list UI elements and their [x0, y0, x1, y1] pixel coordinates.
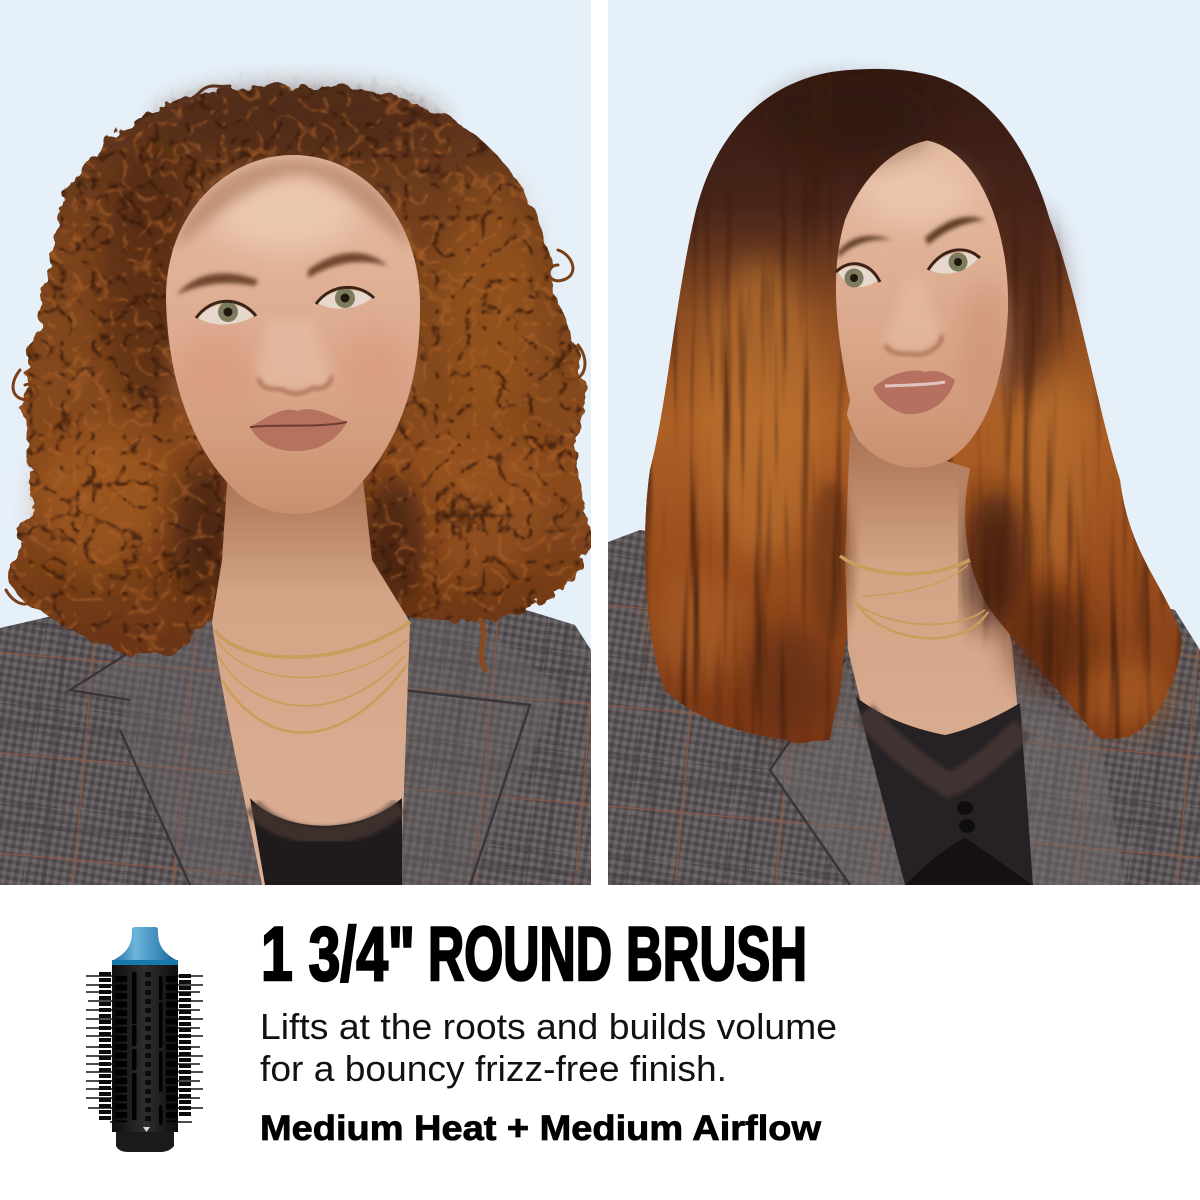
face	[166, 155, 420, 514]
brush blue cap	[112, 927, 178, 965]
brush centre pins	[145, 972, 151, 1124]
brush inner tufts	[121, 976, 172, 1122]
eyes	[196, 287, 374, 325]
eyebrows	[177, 253, 388, 295]
heading	[261, 912, 807, 997]
description text: Lifts at the roots and builds volume	[260, 1006, 837, 1047]
lip gap	[885, 382, 945, 386]
backdrop	[608, 0, 1200, 650]
brush bristle tips	[86, 976, 203, 1122]
brush base	[116, 1132, 174, 1152]
hair side, right lock	[965, 140, 1182, 739]
blazer	[0, 610, 591, 885]
hair front, left curtain	[643, 64, 938, 748]
blazer	[608, 530, 1200, 885]
backdrop	[0, 0, 591, 650]
brush barrel	[112, 962, 178, 1132]
necklaces	[215, 622, 410, 733]
eyebrows	[838, 217, 985, 258]
settings line: Medium Heat + Medium Airflow	[260, 1109, 822, 1148]
face	[834, 140, 1008, 468]
lips	[250, 409, 347, 451]
lips	[873, 371, 955, 414]
neck and chest	[845, 430, 1033, 885]
hair back	[645, 69, 1182, 741]
neck and chest	[212, 470, 410, 885]
camisole	[856, 697, 1033, 885]
lace top	[250, 798, 402, 885]
heading: ROUND	[428, 912, 612, 997]
flyaway curls	[6, 86, 585, 670]
hair mass	[11, 84, 588, 653]
description text: for a bouncy frizz-free finish.	[260, 1048, 727, 1089]
description text	[260, 1006, 837, 1089]
lip line	[250, 422, 347, 427]
panel: after photo, blown-out hair	[608, 0, 1200, 885]
brush vents	[132, 972, 162, 1125]
nose	[258, 320, 332, 394]
heading: 1 3/4"	[261, 912, 415, 997]
heading: BRUSH	[626, 912, 807, 997]
icon: round brush attachment	[86, 927, 203, 1152]
panel: before photo, curly hair	[0, 0, 591, 885]
eyes	[836, 250, 980, 288]
brush white marker	[143, 1127, 150, 1132]
necklaces	[840, 556, 988, 638]
brush outer tufts	[105, 972, 185, 1120]
nose	[885, 280, 942, 355]
